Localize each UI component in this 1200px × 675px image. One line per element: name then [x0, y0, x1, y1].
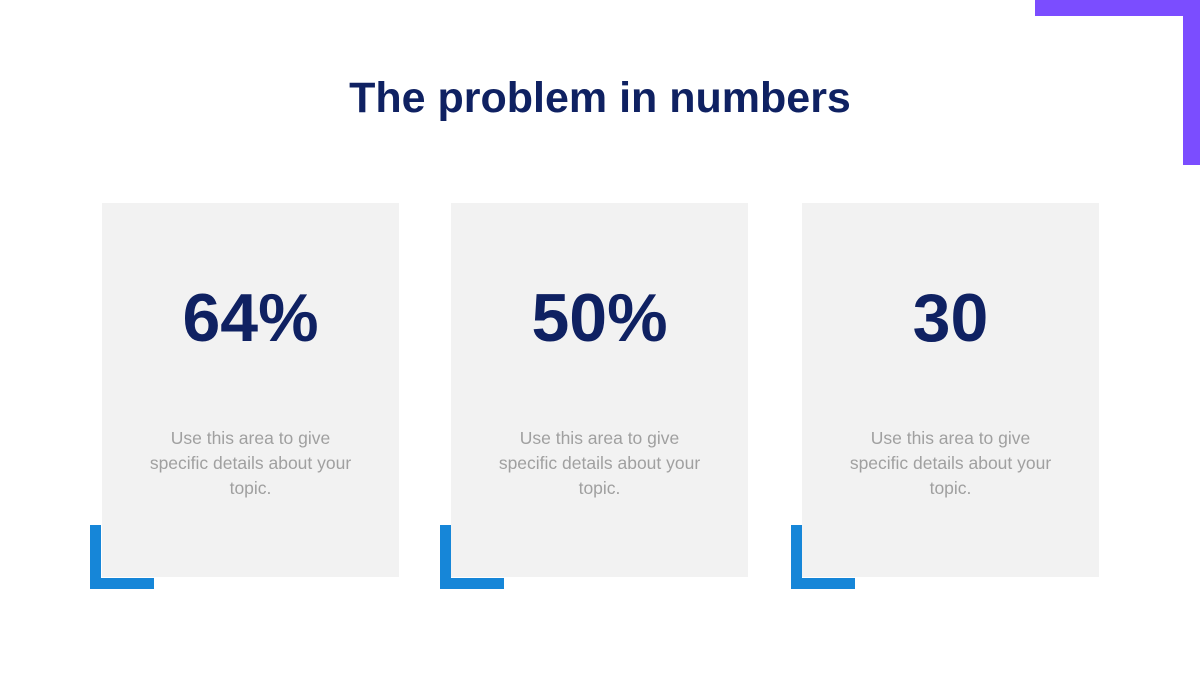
- panel: card 2: [451, 203, 748, 577]
- title: The problem in numbers: [349, 74, 851, 122]
- panel: card 3: [802, 203, 1099, 577]
- text: description 3: Use this area to give specific details about your topic.: [850, 428, 1051, 498]
- text: description 1: Use this area to give specific details about your topic.: [150, 428, 351, 498]
- panel: card 1: [102, 203, 399, 577]
- stat: 50%: 50%: [531, 280, 668, 356]
- stat: 64%: 64%: [182, 280, 319, 356]
- text: description 2: Use this area to give specific details about your topic.: [499, 428, 700, 498]
- bracket 2: [440, 525, 504, 589]
- bracket 3: [791, 525, 855, 589]
- stat: 30: 30: [913, 280, 988, 356]
- corner accent: purple: [1035, 0, 1200, 165]
- bracket 1: [90, 525, 154, 589]
